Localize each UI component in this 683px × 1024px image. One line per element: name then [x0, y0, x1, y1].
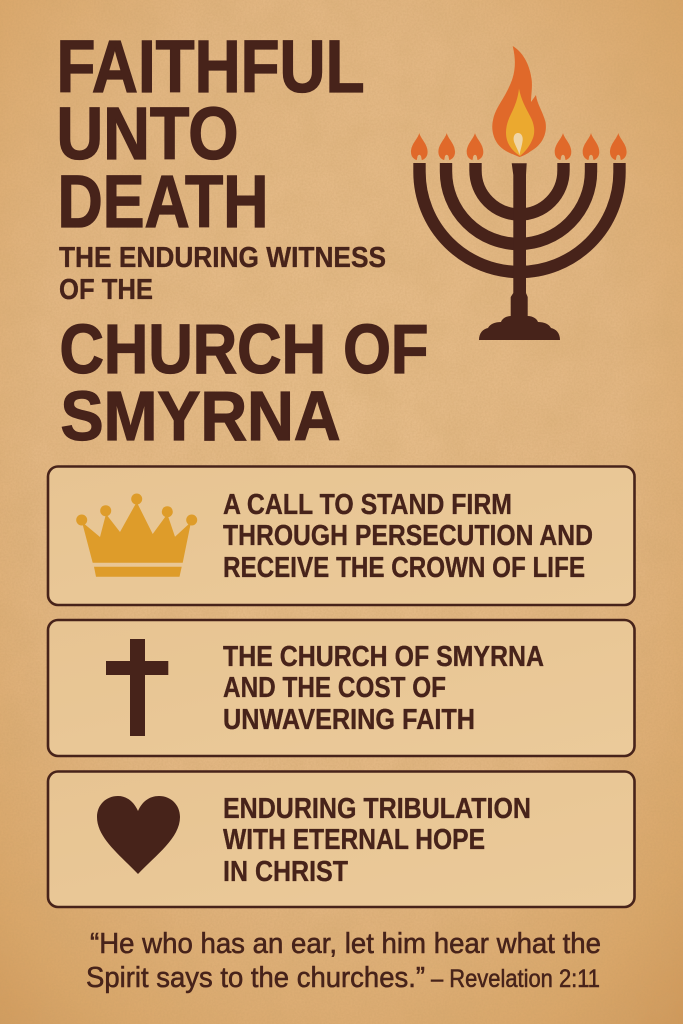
- panel: crown of life: [48, 466, 634, 605]
- text: cost of unwavering faith: AND THE COST OF: [223, 672, 446, 704]
- heading: Church of Smyrna: [60, 310, 428, 455]
- menorah arms and stem: [420, 163, 620, 340]
- quote: Revelation 2:11: – Revelation 2:11: [431, 965, 600, 993]
- text: cost of unwavering faith: THE CHURCH OF SMYRNA: [223, 641, 544, 673]
- title: Faithful Unto Death: DEATH: [58, 160, 268, 243]
- small flames: [411, 133, 627, 160]
- text: enduring tribulation: [223, 793, 531, 888]
- panel: cost of faith: [48, 620, 634, 756]
- text: enduring tribulation: IN CHRIST: [223, 856, 349, 888]
- quote: Revelation 2:11: [86, 928, 601, 994]
- text: stand firm: [223, 489, 593, 584]
- subtitle: The enduring witness of the: THE ENDURING WITNESS: [59, 242, 386, 274]
- title: Faithful Unto Death: UNTO: [56, 92, 238, 175]
- text: stand firm: RECEIVE THE CROWN OF LIFE: [223, 552, 585, 584]
- text: enduring tribulation: WITH ETERNAL HOPE: [223, 824, 485, 856]
- text: enduring tribulation: ENDURING TRIBULATION: [223, 793, 531, 825]
- icon: crown: [76, 494, 197, 577]
- panel: eternal hope: [48, 772, 634, 907]
- text: stand firm: A CALL TO STAND FIRM: [223, 489, 512, 521]
- quote: Revelation 2:11: “He who has an ear, let him hear what the: [90, 928, 601, 960]
- heading: Church of Smyrna: CHURCH OF: [60, 310, 428, 388]
- title: Faithful Unto Death: FAITHFUL: [56, 25, 364, 108]
- icon: heart: [97, 796, 180, 874]
- icon: menorah with flames: [411, 46, 627, 340]
- text: stand firm: THROUGH PERSECUTION AND: [223, 520, 593, 552]
- subtitle: The enduring witness of the: [59, 242, 386, 306]
- subtitle: The enduring witness of the: OF THE: [59, 274, 153, 306]
- icon: cross: [106, 639, 168, 736]
- text: cost of unwavering faith: [223, 641, 544, 736]
- central flame: [492, 46, 546, 157]
- heading: Church of Smyrna: SMYRNA: [60, 377, 340, 455]
- text: cost of unwavering faith: UNWAVERING FAITH: [223, 704, 475, 736]
- quote: Revelation 2:11: Spirit says to the churches.”: [86, 962, 425, 994]
- title: Faithful Unto Death: [56, 25, 364, 243]
